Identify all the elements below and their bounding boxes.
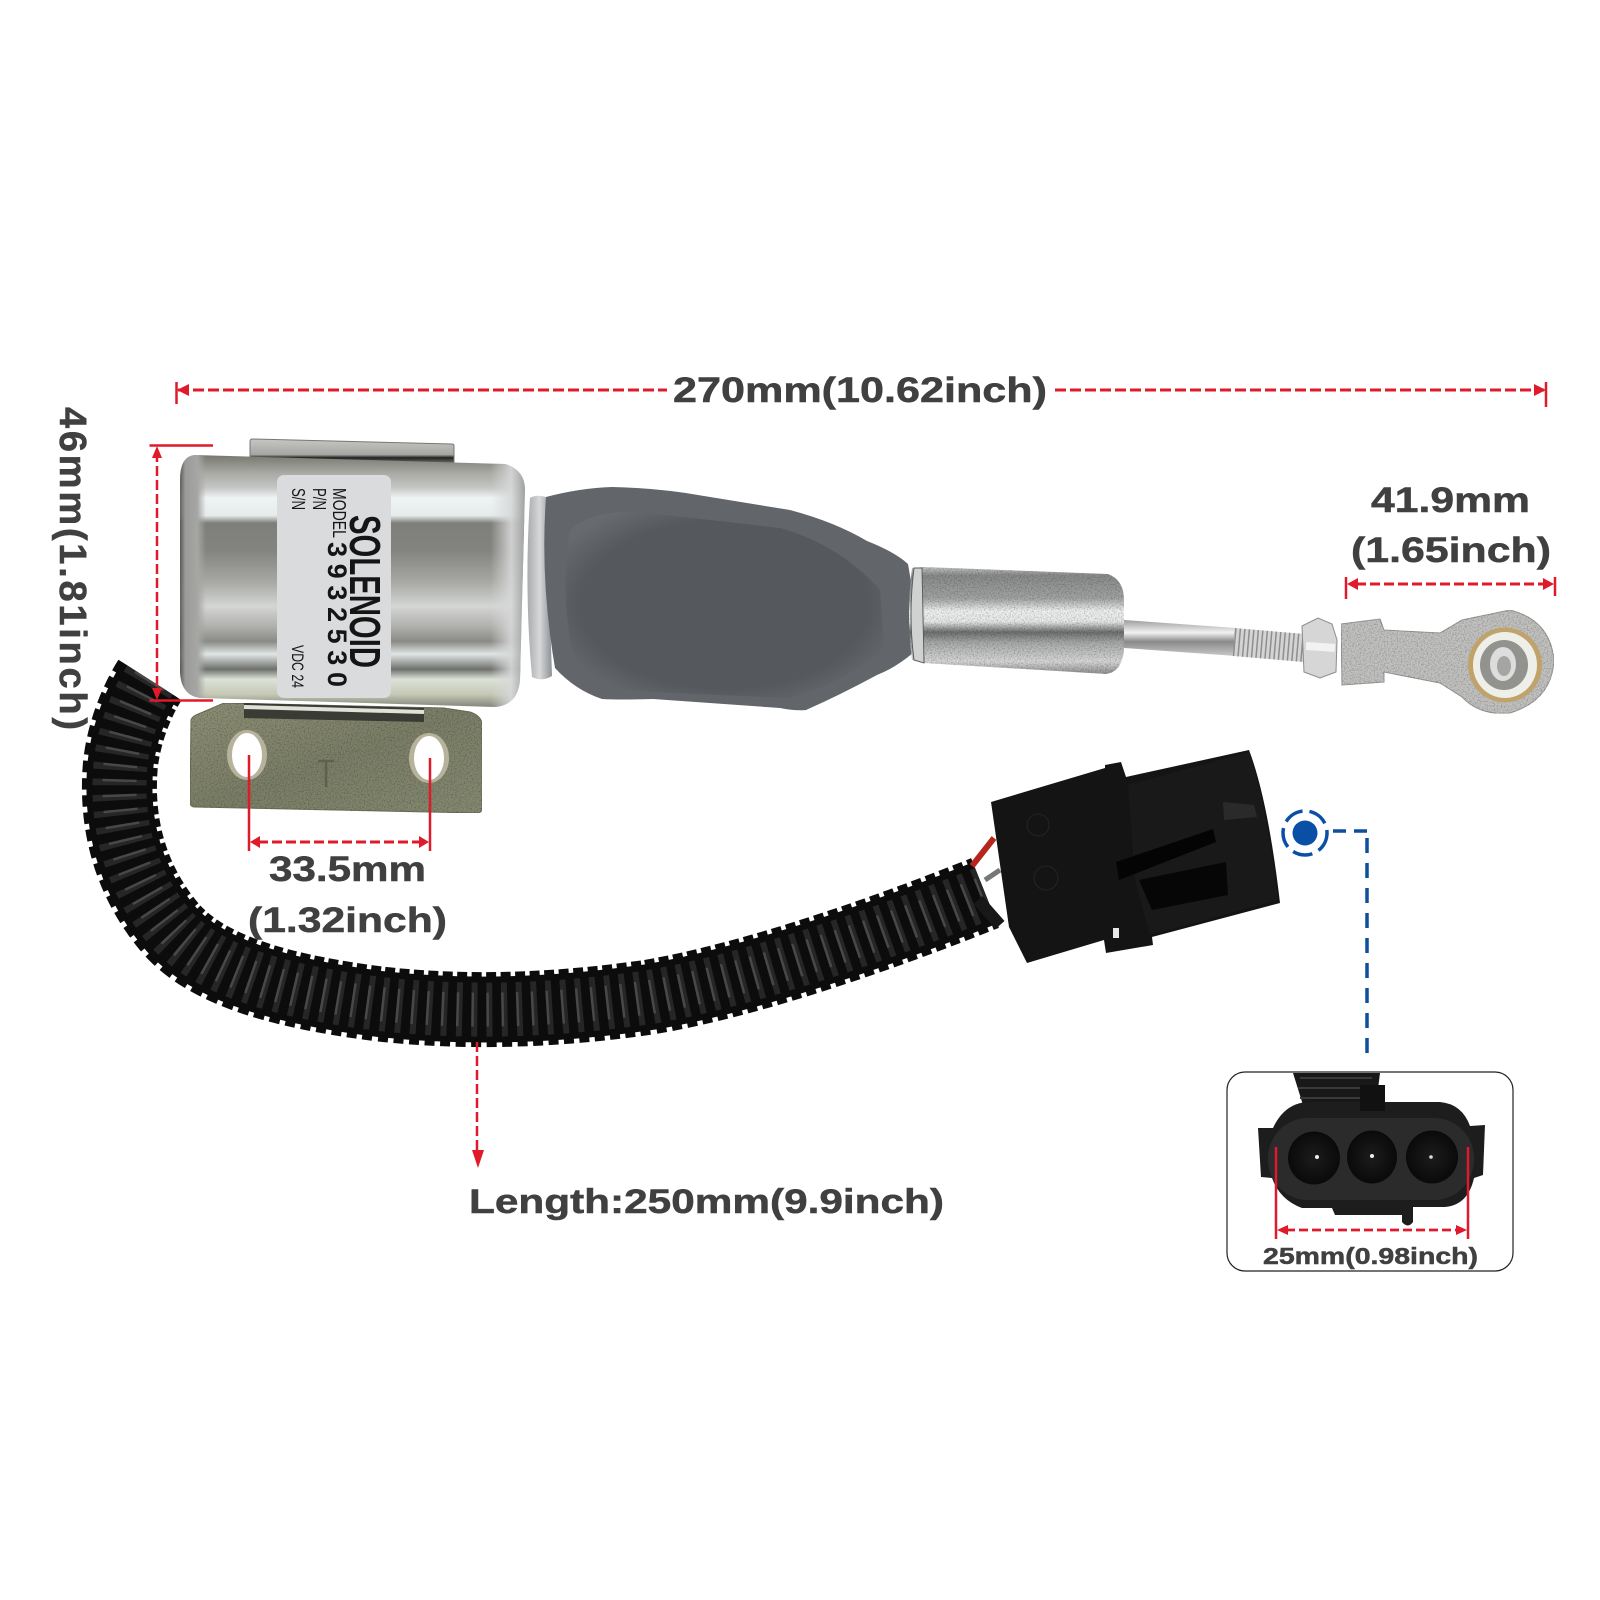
solenoid metal cylinder [180,455,525,707]
dimension: rod end 41.9mm: 41.9mm [1371,481,1530,520]
dimension: rod end 41.9mm [1346,481,1555,599]
dimension: cable length 250mm: Length:250mm(9.9inch) [469,1183,944,1221]
rubber boot [544,487,914,710]
threaded end [1234,628,1304,662]
plunger housing [909,567,1124,674]
product label on cylinder: S/N [288,488,308,510]
dimension: hole spacing 33.5mm: (1.32inch) [248,901,447,940]
dimension: cylinder height 46mm: 46mm(1.81inch) [51,407,93,730]
product label on cylinder: 3932530 [322,542,352,687]
top mounting plate [250,439,454,465]
dimension: cable length 250mm [469,1042,944,1221]
inset cable [1293,1073,1380,1105]
dimension: hole spacing 33.5mm [248,755,447,940]
inset dimension 25mm [1263,1147,1478,1269]
dimension: rod end 41.9mm: (1.65inch) [1351,531,1551,570]
blue callout marker [1283,811,1369,1063]
product label on cylinder: P/N [309,488,329,510]
dimension: cylinder height 46mm [51,407,213,730]
product label on cylinder: SOLENOID [340,515,389,668]
inset dimension 25mm: 25mm(0.98inch) [1263,1243,1478,1269]
product label on cylinder: MODEL [329,488,349,538]
inset connector housing [1258,1085,1485,1226]
bracket: mounting plate with two slotted holes [190,703,482,813]
dimension: overall length 270mm: 270mm(10.62inch) [673,371,1047,410]
connector: black plug body [991,750,1280,963]
dimension: overall length 270mm [176,371,1546,410]
connector wires [972,838,1000,925]
plunger rod [1124,620,1236,656]
product label on cylinder [277,475,391,698]
rod end: shank and eye [1341,610,1554,713]
cable: corrugated black conduit [119,680,985,1010]
lock nut [1302,618,1337,678]
metal collar [527,496,552,679]
inset panel: connector face [1227,1072,1513,1271]
product label on cylinder: VDC 24 [288,645,307,688]
dimension: hole spacing 33.5mm: 33.5mm [269,850,426,889]
